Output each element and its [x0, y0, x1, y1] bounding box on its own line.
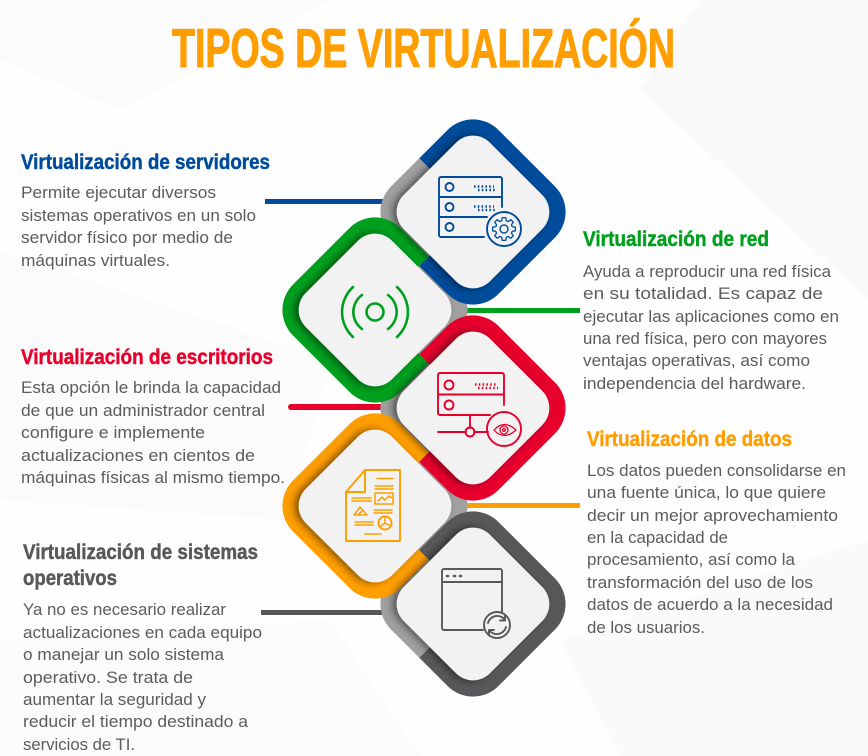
body: datos: procesamiento, así como la [587, 551, 796, 569]
text: servidores [21, 151, 270, 270]
body: datos: datos de acuerdo a la necesidad [587, 596, 833, 614]
body: sistemas operativos: aumentar la seguridad y [23, 691, 207, 709]
icon: window with refresh [442, 569, 510, 638]
body: servidores: servidor físico por medio de [21, 229, 233, 247]
body: sistemas operativos: Ya no es necesario realizar [23, 601, 227, 619]
icon: wireless signal [342, 287, 408, 337]
body: datos: Los datos pueden consolidarse en [587, 462, 846, 480]
text: datos: Virtualización de datos [587, 428, 792, 451]
body: sistemas operativos: o manejar un solo sistema [23, 646, 225, 664]
inner panels [289, 126, 559, 690]
text: datos [587, 428, 846, 637]
body: datos: una fuente única, lo que quiere [587, 484, 826, 502]
body: servidores: Permite ejecutar diversos [21, 184, 216, 202]
body: escritorios: configure e implemente [21, 424, 205, 442]
body: sistemas operativos: servicios de TI. [23, 736, 135, 754]
icon: server with eye [438, 373, 521, 446]
coloured rings [282, 119, 566, 697]
body: sistemas operativos: reducir el tiempo destinado a [23, 713, 249, 731]
body: red: una red física, pero con mayores [583, 330, 827, 348]
body: servidores: sistemas operativos en un solo [21, 207, 256, 225]
body: datos: transformación del uso de los [587, 574, 813, 592]
body: red: en su totalidad. Es capaz de [583, 285, 823, 303]
body: red: Ayuda a reproducir una red física [583, 263, 832, 281]
body: datos [587, 462, 846, 637]
body: red: ventajas operativas, así como [583, 352, 810, 370]
body: escritorios: máquinas físicas al mismo tiempo. [21, 469, 285, 487]
icon: data document [346, 470, 400, 541]
text: escritorios [21, 346, 285, 487]
text: sistemas operativos: operativos [23, 567, 117, 590]
text: red: Virtualización de red [583, 228, 769, 251]
body: escritorios: actualizaciones en cientos de [21, 447, 255, 465]
text: sistemas operativos: Virtualización de sistemas [23, 541, 258, 564]
body: sistemas operativos: actualizaciones en cada equipo [23, 624, 262, 642]
text: servidores: Virtualización de servidores [21, 151, 270, 174]
text: sistemas operativos [23, 541, 262, 754]
body: datos: en la capacidad de [587, 529, 728, 547]
body: datos: de los usuarios. [587, 619, 705, 637]
body: sistemas operativos [23, 601, 262, 754]
diamond chain [282, 119, 566, 697]
text: escritorios: Virtualización de escritorios [21, 346, 273, 369]
body: servidores [21, 184, 256, 270]
gray wedges [380, 158, 468, 658]
body: escritorios [21, 379, 285, 487]
connector lines [261, 199, 580, 615]
body: red: independencia del hardware. [583, 375, 806, 393]
body: red: ejecutar las aplicaciones como en [583, 308, 839, 326]
body: red [583, 263, 839, 393]
body: servidores: máquinas virtuales. [21, 252, 170, 270]
text: red [583, 228, 839, 393]
body: datos: decir un mejor aprovechamiento [587, 507, 838, 525]
body: sistemas operativos: operativo. Se trata de [23, 669, 193, 687]
body: escritorios: Esta opción le brinda la capacidad [21, 379, 281, 397]
body: escritorios: de que un administrador central [21, 402, 265, 420]
icon: server with gear [439, 177, 521, 246]
